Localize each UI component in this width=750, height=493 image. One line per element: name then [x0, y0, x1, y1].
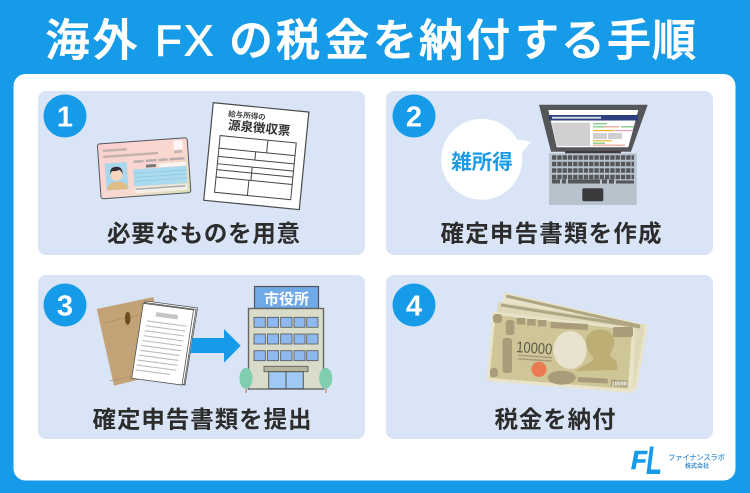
logo: 株式会社 — [685, 462, 709, 470]
title: 海外FXの税金を納付する手順 — [46, 16, 696, 66]
badge 1 — [44, 94, 86, 138]
white card — [14, 74, 736, 483]
icon: laptop — [539, 105, 648, 205]
logo: F — [631, 445, 648, 475]
badge 3 — [44, 284, 86, 326]
arrow — [190, 329, 241, 363]
badge 4: 4 — [406, 290, 422, 322]
icon: city hall — [240, 286, 332, 393]
icon: envelope — [97, 297, 170, 386]
icon: ID card — [97, 138, 191, 199]
badge 3: 3 — [57, 290, 73, 322]
badge 1: 1 — [57, 102, 73, 134]
speech bubble: 雑所得 — [451, 151, 513, 174]
icon: banknotes: 10000 — [612, 382, 627, 388]
icon: withholding tax slip — [204, 103, 309, 210]
icon: banknotes: 10000 — [516, 339, 553, 359]
label: 確定申告書類を作成 — [440, 220, 662, 246]
panel: step 4 — [386, 275, 713, 439]
logo: ファイナンスラボ — [668, 453, 726, 462]
badge 2 — [392, 94, 436, 138]
label: 確定申告書類を提出 — [92, 406, 312, 432]
icon: withholding tax slip: 源泉徴収票 — [227, 117, 291, 138]
logo — [631, 439, 726, 483]
panel: step 3 — [38, 275, 365, 439]
icon: withholding tax slip: 給与所得の — [228, 108, 266, 122]
icon: banknotes — [487, 292, 648, 393]
badge 2: 2 — [406, 102, 422, 134]
badge 4 — [392, 284, 436, 326]
label: 税金を納付 — [494, 406, 616, 432]
icon: city hall: 市役所 — [264, 290, 309, 308]
label: 必要なものを用意 — [107, 220, 300, 246]
panel: step 1 — [38, 91, 365, 255]
icon: document stack — [132, 301, 198, 385]
panel: step 2 — [386, 91, 713, 255]
logo: L — [646, 439, 662, 483]
speech bubble — [441, 119, 531, 200]
